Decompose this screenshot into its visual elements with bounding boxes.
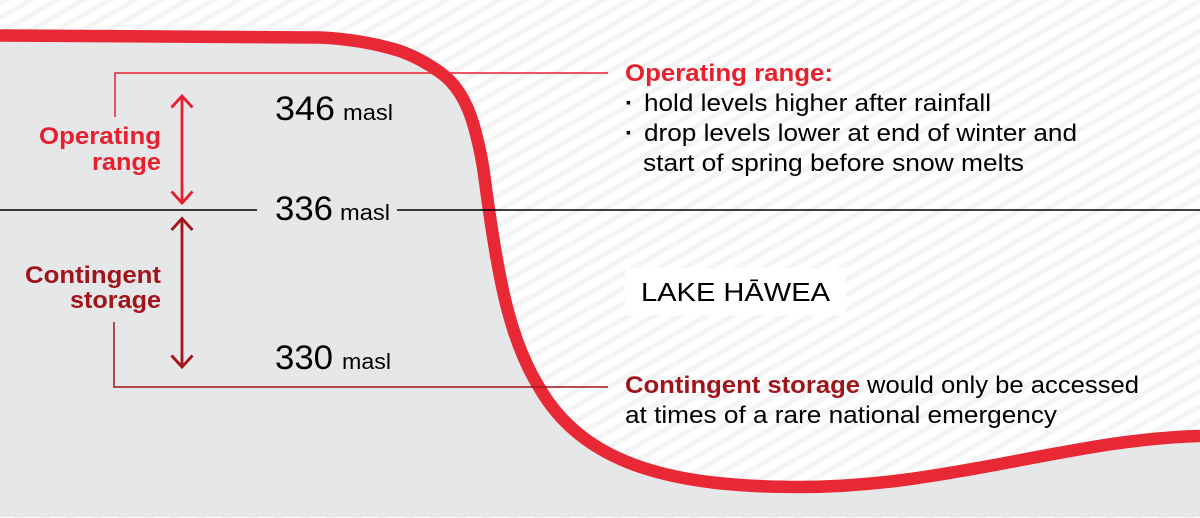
text block: operating range description: drop levels lower at end of winter and — [644, 120, 1077, 147]
text block: contingent storage description: would only be accessed — [866, 372, 1139, 399]
label: Lake Hāwea: LAKE HĀWEA — [641, 277, 831, 307]
text block: contingent storage description: Contingent storage — [625, 372, 860, 399]
level: 330 masl: 330 — [275, 339, 333, 377]
label: operating range: Operating — [39, 123, 161, 150]
label: Lake Hāwea — [625, 268, 846, 315]
level: 346 masl — [275, 90, 393, 128]
336 masl level line — [0, 209, 1200, 211]
arrow: contingent storage — [172, 218, 192, 367]
arrow: operating range — [172, 96, 192, 203]
text block: operating range description: hold levels higher after rainfall — [644, 90, 991, 117]
operating range leader line — [115, 73, 608, 117]
text block: operating range description — [625, 60, 1077, 177]
text block: contingent storage description: at times of a rare national emergency — [625, 402, 1057, 429]
level: 336 masl: 336 — [275, 190, 333, 228]
label: contingent storage: storage — [70, 287, 161, 314]
level: 346 masl: 346 — [275, 90, 335, 128]
level: 330 masl — [275, 339, 391, 377]
level: 336 masl: masl — [340, 200, 390, 225]
level: 346 masl: masl — [343, 100, 393, 125]
label: operating range — [39, 123, 161, 176]
label: contingent storage: Contingent — [25, 262, 161, 289]
label: contingent storage — [25, 262, 161, 314]
text block: operating range description: · — [625, 90, 633, 117]
contingent storage leader line — [114, 322, 608, 387]
text block: contingent storage description — [625, 372, 1139, 429]
text block: operating range description: start of spring before snow melts — [643, 150, 1024, 177]
text block: operating range description: Operating range: — [625, 60, 833, 87]
level: 330 masl: masl — [342, 349, 391, 374]
level: 336 masl — [275, 190, 390, 228]
text block: operating range description: · — [625, 120, 633, 147]
label: operating range: range — [92, 149, 161, 176]
